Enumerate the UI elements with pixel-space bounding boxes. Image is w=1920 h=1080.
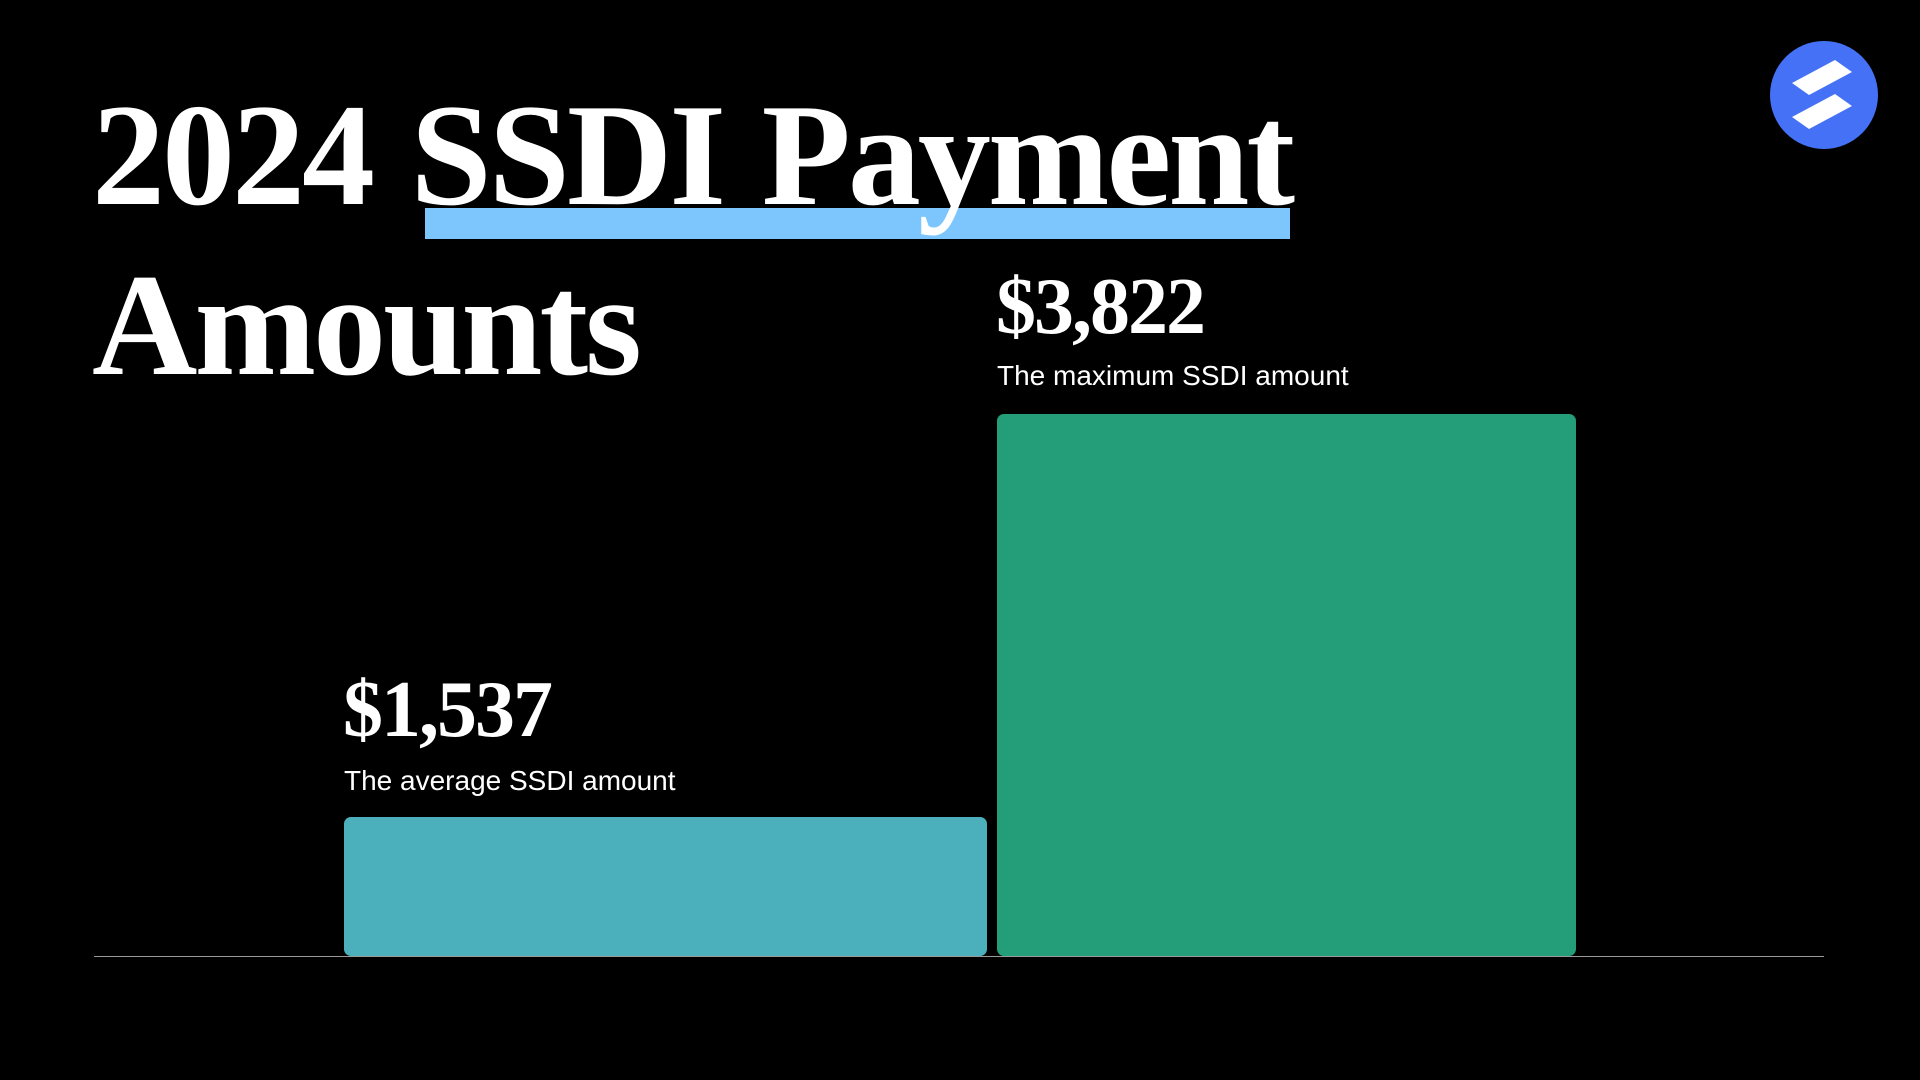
title: Amounts [92,244,639,406]
value: max: $3,822 [996,263,1204,351]
logo icon [1770,41,1878,149]
label: max: The maximum SSDI amount [997,360,1349,391]
title underline highlight [425,208,1290,239]
bar: max [997,414,1576,956]
value: average: $1,537 [343,666,551,754]
bar: average [344,817,987,956]
label: average: The average SSDI amount [344,765,676,796]
title: 2024 SSDI Payment [92,74,1292,236]
title [92,74,1294,406]
